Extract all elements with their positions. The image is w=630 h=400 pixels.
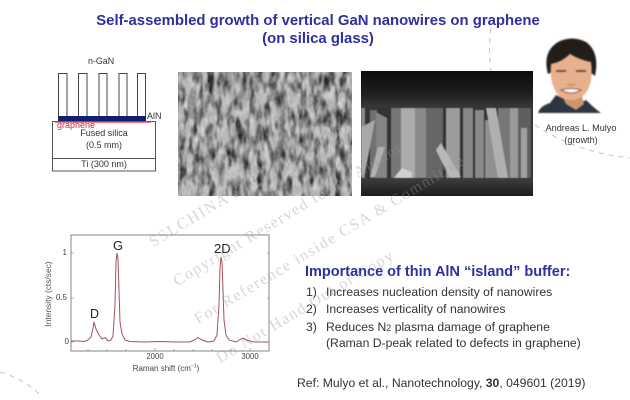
portrait photo — [537, 38, 602, 114]
title: (on silica glass) — [262, 31, 374, 47]
nose shade — [567, 84, 575, 85]
layer structure diagram — [52, 56, 162, 172]
graphene layer — [55, 121, 151, 123]
axis ticks — [71, 253, 269, 351]
peak label 2D: 2D — [214, 241, 231, 256]
eyes — [556, 70, 586, 72]
fused silica label — [80, 128, 128, 150]
item 3: 3) — [306, 320, 317, 334]
fused silica and Ti boxes — [52, 122, 156, 171]
graphene label: graphene — [57, 120, 95, 130]
Raman spectrum chart — [43, 234, 270, 373]
fused silica label: Fused silica — [80, 128, 128, 138]
y tick labels: 1 — [63, 248, 67, 257]
hair — [546, 38, 596, 76]
numbered list — [306, 285, 581, 350]
x axis title: Raman shift (cm−1) — [133, 363, 199, 373]
neck — [562, 96, 584, 110]
y tick label 0.5: 0.5 — [56, 293, 67, 302]
watermark text: Copyright Reserved to the Author — [170, 139, 406, 290]
item 2 text: Increases verticality of nanowires — [326, 302, 506, 316]
importance heading: Importance of thin AlN “island” buffer: — [305, 264, 570, 280]
x tick label 3000: 3000 — [241, 352, 259, 361]
item 2: 2) — [306, 302, 317, 316]
watermark text: For Reference inside CSA & Committee — [191, 152, 468, 328]
y axis title: Intensity (cts/sec) — [43, 261, 53, 327]
portrait caption — [546, 123, 616, 145]
title — [96, 13, 540, 47]
nanowire pillars — [58, 74, 146, 116]
face — [551, 54, 592, 100]
peak label D: D — [90, 307, 99, 321]
item 3 text: Reduces N2 plasma damage of graphene — [326, 320, 550, 334]
item 1 text: Increases nucleation density of nanowires — [326, 285, 552, 299]
AlN layer — [58, 116, 146, 121]
shoulders — [538, 95, 601, 113]
spectrum curve — [71, 253, 269, 342]
watermark text: Do Not Hand Out or Copy — [213, 247, 398, 367]
title: Self-assembled growth of vertical GaN nanowires on graphene — [96, 13, 540, 29]
portrait caption: (growth) — [564, 134, 598, 144]
peak label G: G — [113, 238, 123, 253]
watermark text: SSLCHINA & Beijing Author — [146, 117, 353, 251]
item 3 text — [326, 320, 581, 350]
portrait caption: Andreas L. Mulyo — [546, 123, 616, 133]
plot frame — [71, 235, 269, 351]
fused silica label: (0.5 mm) — [86, 140, 122, 150]
y tick label 0: 0 — [65, 337, 69, 346]
item 3 text: (Raman D-peak related to defects in graphene) — [326, 336, 581, 350]
SEM image: cross-section of nanowires — [361, 71, 533, 196]
n-GaN label: n-GaN — [88, 56, 114, 66]
x tick label 2000: 2000 — [146, 352, 164, 361]
mouth — [561, 88, 581, 93]
item 1: 1) — [306, 285, 317, 299]
reference line: Ref: Mulyo et al., Nanotechnology, 30, 049601 (2019) — [297, 376, 585, 390]
AlN label: AlN — [147, 111, 162, 121]
Ti label: Ti (300 nm) — [81, 159, 127, 169]
